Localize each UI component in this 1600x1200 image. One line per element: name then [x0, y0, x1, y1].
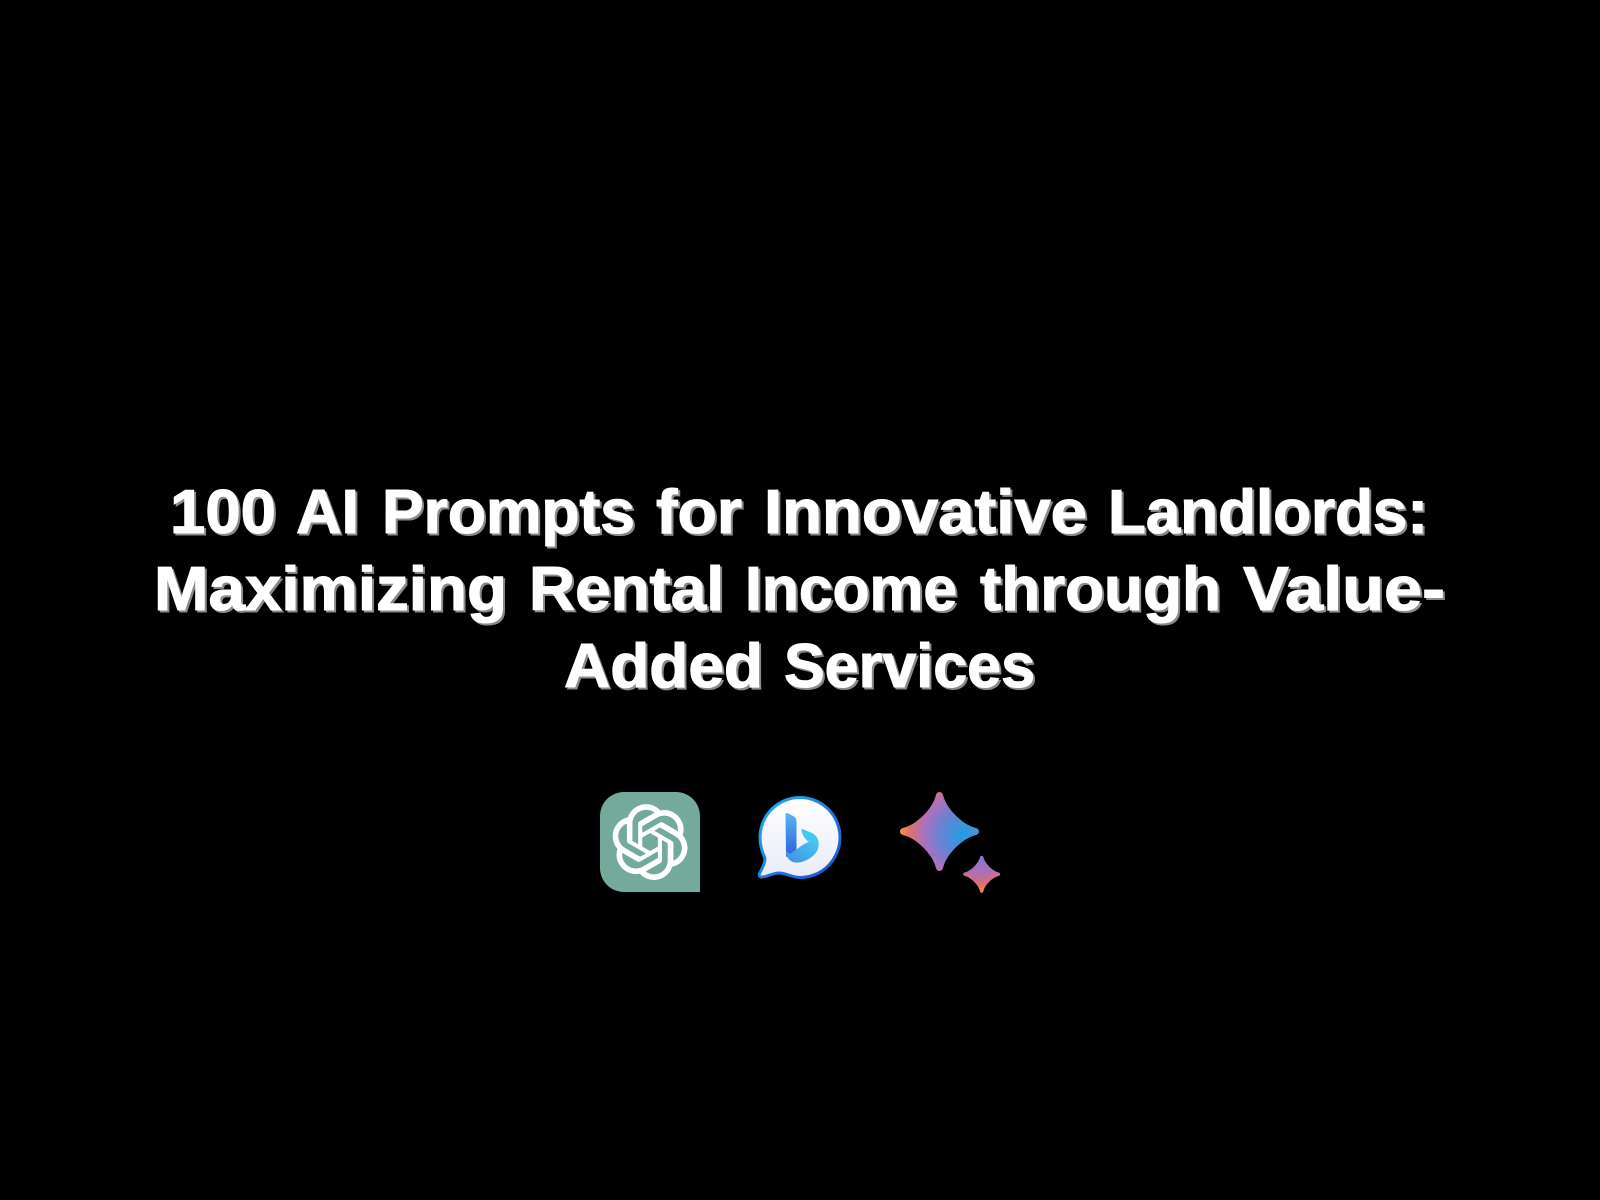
title: Maximizing [154, 555, 507, 624]
title: Landlords: [1108, 478, 1428, 547]
title: for [656, 478, 742, 547]
icon: Gemini sparkles [900, 792, 1000, 893]
title: Innovative [764, 478, 1087, 547]
title: Rental [529, 555, 724, 624]
title: Value- [1243, 555, 1445, 624]
title: through [980, 555, 1221, 624]
icon: Bing chat logo [759, 798, 840, 878]
title: Added [564, 632, 763, 701]
icon: ChatGPT logo [600, 792, 700, 892]
title [154, 478, 1445, 701]
title: Prompts [382, 478, 635, 547]
title: AI [296, 478, 359, 547]
title: 100 [170, 478, 276, 547]
title: Income [745, 555, 957, 624]
title: Services [784, 632, 1035, 701]
